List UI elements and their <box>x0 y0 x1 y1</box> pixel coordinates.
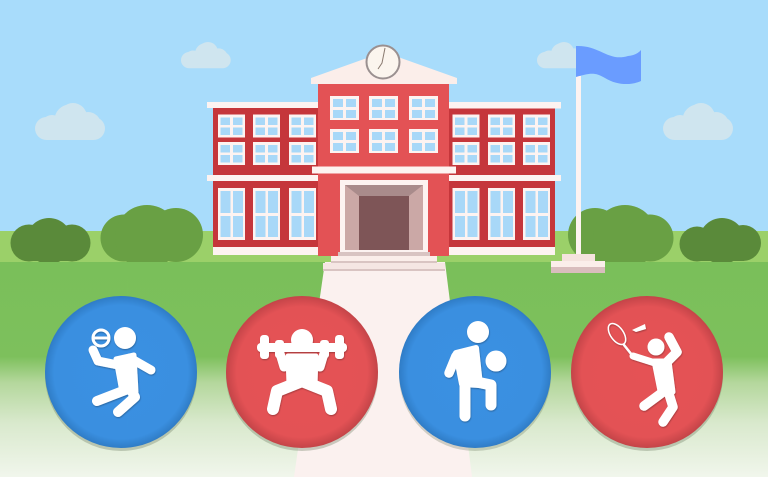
entrance doorway <box>340 180 428 256</box>
pediment roof <box>311 52 457 84</box>
cloud: behind flag <box>537 42 587 68</box>
school building <box>207 46 561 271</box>
center windows <box>330 96 438 153</box>
sport badge: soccer <box>399 296 551 451</box>
bushes: left <box>10 205 203 269</box>
right wing <box>449 102 561 255</box>
cloud: behind school left <box>181 42 231 68</box>
flag pole <box>551 76 605 273</box>
center cornice <box>312 166 456 174</box>
walkway <box>294 262 472 477</box>
back lawn <box>0 231 768 263</box>
icon: weightlifter <box>257 329 347 409</box>
flag <box>576 46 641 84</box>
entrance steps <box>323 252 445 271</box>
icon: badminton player <box>605 320 677 422</box>
center block <box>318 83 449 256</box>
icon: volleyball player <box>93 327 151 412</box>
sport badge: badminton <box>571 296 723 451</box>
sport badge: volleyball <box>45 296 197 451</box>
cloud: far right <box>663 103 733 140</box>
sport badge: weightlifting <box>226 296 378 451</box>
cloud: far left <box>35 103 105 140</box>
sky background <box>0 0 768 232</box>
left wing <box>207 102 319 255</box>
foreground lawn <box>0 262 768 477</box>
bushes: right <box>568 205 761 269</box>
clock <box>366 46 400 78</box>
icon: soccer player <box>449 321 506 416</box>
